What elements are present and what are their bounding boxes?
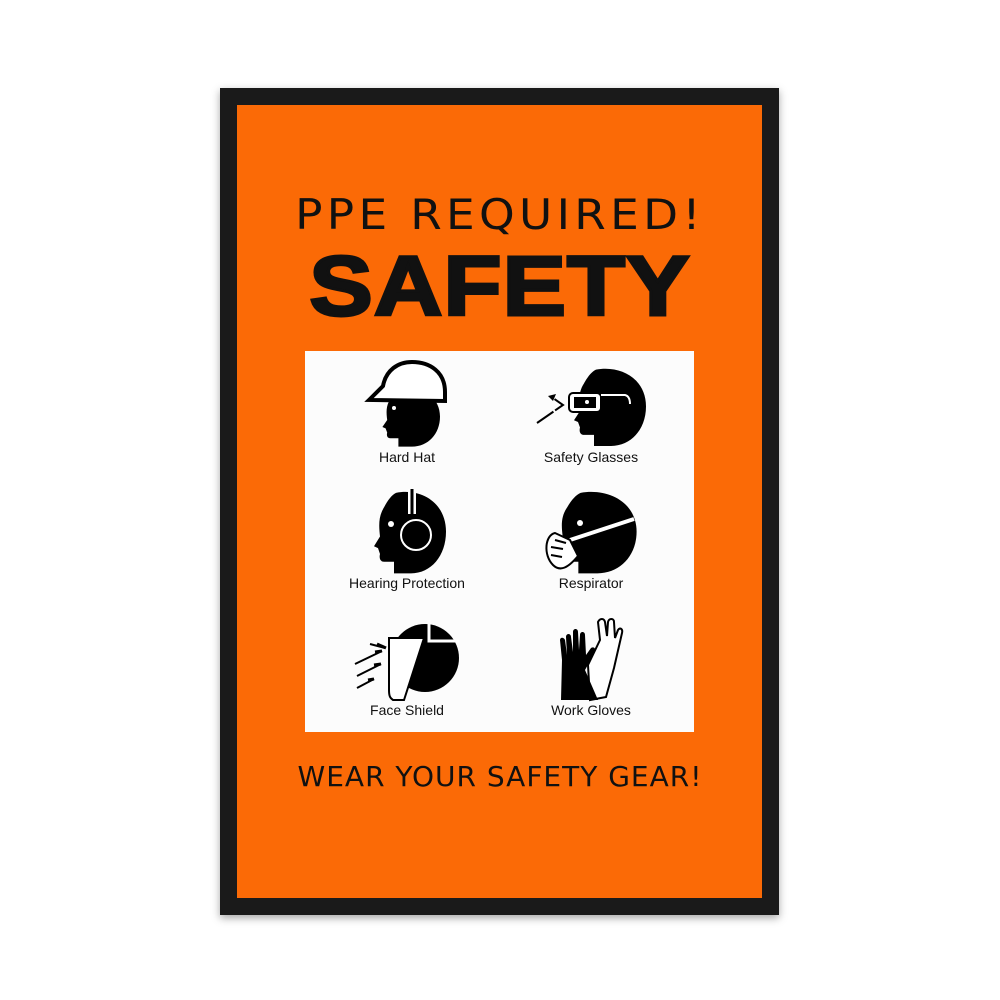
icon: hard hat: Hard Hat <box>379 449 435 465</box>
icon: hearing protection <box>349 489 465 591</box>
icon: hearing protection: Hearing Protection <box>349 575 465 591</box>
icon: work gloves <box>551 619 631 718</box>
poster frame <box>220 88 779 915</box>
panel: PPE icons <box>305 351 694 732</box>
icon: face shield: Face Shield <box>370 702 444 718</box>
icon: face shield <box>355 620 459 718</box>
orange poster <box>237 105 762 898</box>
icon: work gloves: Work Gloves <box>551 702 631 718</box>
icon: safety glasses: Safety Glasses <box>544 449 638 465</box>
icon: respirator: Respirator <box>559 575 624 591</box>
title: PPE REQUIRED: PPE REQUIRED! <box>295 190 705 239</box>
heading: SAFETY: SAFETY <box>309 239 691 333</box>
icon: hard hat <box>369 362 445 465</box>
footer text: WEAR YOUR SAFETY GEAR! <box>298 760 702 793</box>
icon: safety glasses <box>537 369 646 465</box>
icon: respirator <box>546 492 637 591</box>
